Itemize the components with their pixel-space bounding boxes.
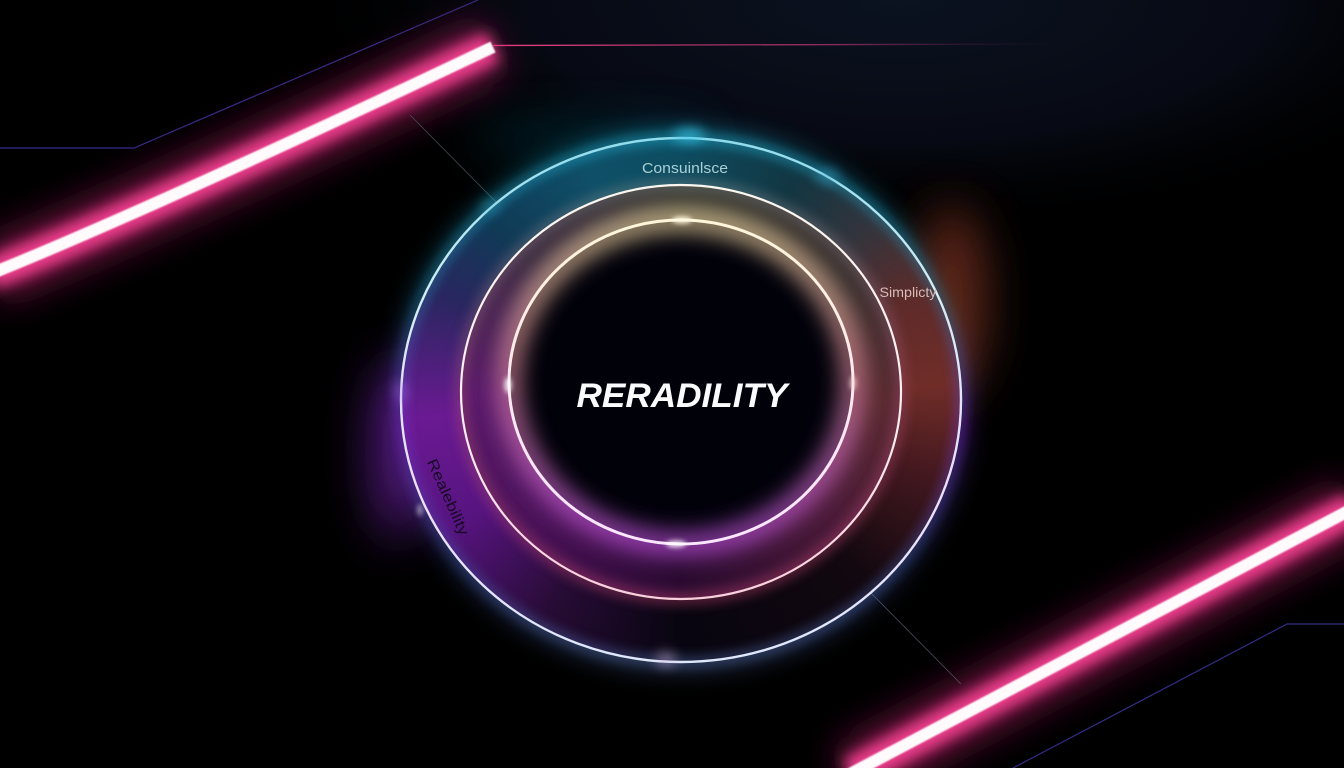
middle band fill (462, 186, 900, 598)
center title: RERADILITY (576, 377, 791, 415)
leader line: lower right (869, 591, 961, 684)
decorative line: upper-left blue circuit trace (0, 0, 478, 148)
inner ring glow (509, 220, 853, 544)
outer ring (401, 138, 961, 662)
ring label: Realebility: Realebility (423, 456, 472, 539)
center dark core (509, 220, 853, 544)
outer ring halo (372, 126, 986, 663)
ring label: Simplicty: Simplicty (880, 284, 936, 300)
middle ring glow (461, 185, 901, 599)
decorative line: lower-right blue circuit trace (1013, 624, 1344, 768)
neon bar: upper left (0, 47, 493, 274)
neon bar: lower right (850, 508, 1344, 768)
decorative line: thin pink top trace (493, 44, 1060, 46)
middle ring (461, 185, 901, 599)
inner ring (509, 220, 853, 544)
leader line: upper left (410, 115, 497, 203)
glow nodes (396, 128, 856, 666)
outer ring glow (401, 138, 961, 662)
concentric ring diagram (372, 95, 986, 695)
ring label: Consuinlsce: Consuinlsce (642, 160, 728, 177)
outer band fill (402, 140, 960, 660)
